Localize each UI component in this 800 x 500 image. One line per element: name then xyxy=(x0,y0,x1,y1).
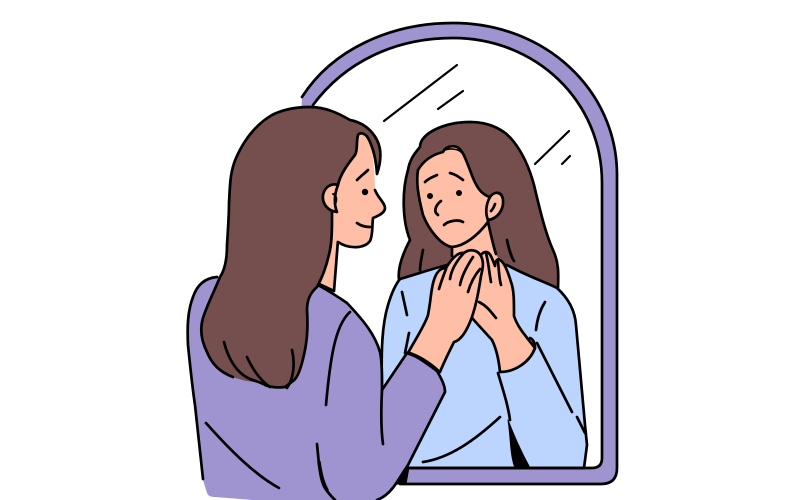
reflection: left hand xyxy=(408,250,483,372)
mirror glints xyxy=(384,65,570,164)
reflection: right hand xyxy=(472,252,535,372)
woman: ear xyxy=(323,184,338,212)
reflection: hair xyxy=(399,122,558,290)
reflection: neck outline xyxy=(452,222,496,256)
mirror frame xyxy=(301,23,617,484)
woman: sweater xyxy=(188,277,445,500)
woman: hair xyxy=(201,107,380,387)
reflection: face xyxy=(417,146,490,247)
woman: neck xyxy=(317,212,338,291)
reflection: sweater creases xyxy=(402,292,585,462)
reflection: ear xyxy=(486,193,503,220)
reflection: hair strands xyxy=(420,240,514,270)
reflection: right sleeve xyxy=(498,338,535,420)
mirror base shadow xyxy=(396,467,409,484)
woman: facial features xyxy=(333,170,370,227)
woman: sweater creases xyxy=(206,312,350,500)
reflection: sweater xyxy=(382,265,587,468)
reflection: right sleeve shadow xyxy=(508,420,530,468)
woman: face xyxy=(332,134,385,247)
reflection: left hand fingers xyxy=(439,254,480,292)
reflection: right hand fingers xyxy=(479,253,501,318)
reflection: neck xyxy=(452,222,500,262)
reflection: facial features xyxy=(425,149,495,225)
woman: sweater outline xyxy=(188,277,445,500)
woman: hair strands xyxy=(224,342,294,388)
